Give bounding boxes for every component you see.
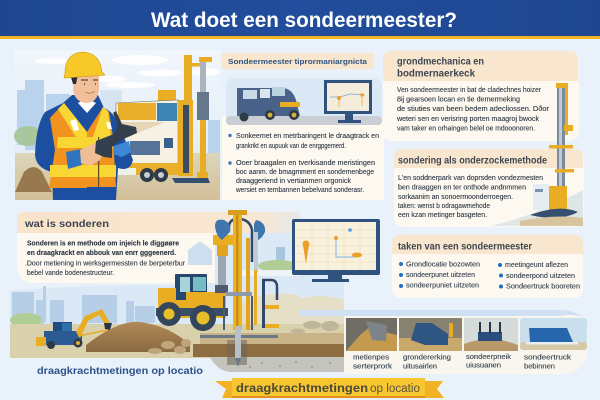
panel body xyxy=(222,116,384,200)
van and monitor image xyxy=(226,78,382,125)
panel heading xyxy=(383,51,578,81)
soil pile xyxy=(15,167,52,192)
truck xyxy=(116,90,180,182)
caption: draagkrachtmetingen op locatio: draagkrachtmetingen op locatio xyxy=(37,366,203,377)
ground cross section xyxy=(200,333,344,345)
panel: sondering als onderzoekemethode xyxy=(394,149,584,227)
body text: 8ij gearsoen locan en tie demermeking xyxy=(397,96,520,104)
device xyxy=(95,111,137,158)
label line 2: bebinnen xyxy=(524,364,555,370)
bullet 2: draaggeriend in vertianmen orgonick xyxy=(236,178,352,185)
label line 2: uitusairlen xyxy=(403,364,437,370)
body text: Ven sondeermeester in bat de cladechnes hoizer xyxy=(397,87,542,94)
icon: central sounding rig xyxy=(200,210,279,367)
panel heading: Sondeermeester tiprormaniargnicta xyxy=(228,57,368,66)
sleeve cuff xyxy=(66,149,82,169)
body text: ben draaggen en ter onthode andnmmen xyxy=(398,184,526,192)
hand xyxy=(80,143,105,165)
title banner xyxy=(0,0,600,39)
background scene behind rig xyxy=(188,233,300,324)
body text: en draagkrackt en abbouk van enrr gggeenerd. xyxy=(27,250,176,257)
drill rig xyxy=(172,55,212,183)
bullet 2: Ooer braagalen en tverkisande meristingen xyxy=(236,160,375,167)
rocks beside the drill xyxy=(291,321,339,334)
body text: L'en soddnerpark van doprsden vondezmesten xyxy=(398,175,543,182)
body text: bebel vande bodenestructeur. xyxy=(27,270,114,277)
thumbnail: blue machine xyxy=(399,318,462,370)
clouds xyxy=(35,55,220,88)
label: grondererking xyxy=(403,354,451,362)
panel heading xyxy=(392,235,583,254)
task list right xyxy=(498,262,580,290)
base scene xyxy=(490,190,583,226)
hard hat xyxy=(64,52,105,78)
panel: sondeermeester tip xyxy=(222,53,384,200)
soil pile xyxy=(86,322,190,352)
panel heading: taken van een sondeermeester xyxy=(398,242,532,252)
bullet 2: boc aanm. de bmagmment en sondernenbege xyxy=(236,169,374,176)
illustration: construction site xyxy=(10,245,344,372)
label: sondeertruck xyxy=(524,354,572,362)
title: Wat doet een sondeermeester? xyxy=(151,9,457,32)
panel heading: wat is sonderen xyxy=(24,219,109,230)
body text: de stiuties van been bedem adecliossen. Dðor xyxy=(397,105,550,113)
body text xyxy=(398,175,543,219)
neck and face xyxy=(73,74,99,103)
skyline xyxy=(12,286,155,325)
panel heading xyxy=(17,212,300,233)
bottom ribbon: draagkrachtmetingen xyxy=(236,383,368,395)
bullet 1 xyxy=(228,133,379,150)
panel heading xyxy=(394,149,583,168)
body text: weteri sen en verisring porten maagroj bwock xyxy=(396,116,540,123)
task list left: sondeerpunet uitzeten xyxy=(406,272,475,279)
panel: thumbnail strip xyxy=(300,310,588,374)
thumbnail: soil and bucket xyxy=(346,318,397,370)
task list right: meetingeunt aflezen xyxy=(505,262,568,269)
body text: vam taker en orhaingen belel oe mdooonoren. xyxy=(397,126,535,132)
panel heading: grondmechanica en xyxy=(397,56,484,68)
panel heading: sondering als onderzockemethode xyxy=(398,156,547,166)
bullet 1: grankrikt en aupuuk van de enrgpgemerd. xyxy=(236,143,346,150)
task list right: sondeerpond uitzeten xyxy=(506,273,575,280)
panel: wat is sonderen xyxy=(17,212,300,283)
icon: excavator xyxy=(36,309,112,349)
body text: Sonderen is en methode om injeich le diggøøre xyxy=(27,240,179,248)
city xyxy=(17,80,220,153)
bullet 2: wersiet en ternbannen bebelvand sonderasr. xyxy=(235,187,364,194)
panel heading xyxy=(222,53,374,69)
body text xyxy=(25,240,186,277)
bullet 1: Sonkeemet en metrbaringent le draagtrack en xyxy=(236,133,379,140)
glove xyxy=(113,141,131,157)
monitor chart xyxy=(292,219,380,282)
body text: .Door metiening in werksgermessten de berpeterbur xyxy=(25,260,186,268)
vest xyxy=(49,103,87,188)
task list left xyxy=(399,262,480,290)
panel: grondmechanica xyxy=(383,51,579,141)
thumbnail: blue bucket xyxy=(520,318,587,370)
bottom ribbon xyxy=(215,378,444,398)
label: sondeerpneik xyxy=(466,354,512,361)
icon: tall drill rig xyxy=(520,83,583,226)
jacket xyxy=(35,95,133,200)
body text xyxy=(396,87,550,132)
illustration: sondeermeester with truck xyxy=(14,50,220,200)
icon: large yellow truck xyxy=(156,274,228,331)
task list left: sondeerpuniet uitzeten xyxy=(406,282,479,290)
body text: taken: wenst b odragawmehode xyxy=(398,203,490,210)
label: metienpes xyxy=(353,354,390,362)
thumbnail: sounding truck xyxy=(464,318,518,370)
label line 2: uiusuanen xyxy=(466,362,501,370)
worker xyxy=(35,52,137,200)
body text: sorkaanim an sonoermoonderroegen. xyxy=(398,194,513,201)
panel heading: bodmernaerkeck xyxy=(397,68,475,80)
task list right: Sondeertruck booreten xyxy=(506,284,580,290)
task list left: Grondlocatie bozowten xyxy=(406,262,480,268)
body text: een kzan metinger basgeten. xyxy=(398,212,487,219)
bottom ribbon: op locatio xyxy=(370,383,420,395)
label line 2: serterprork xyxy=(353,364,393,370)
bullet 2 xyxy=(228,160,375,194)
collar and shirt xyxy=(78,100,96,113)
panel: taken van een sondeermeester xyxy=(392,235,583,298)
